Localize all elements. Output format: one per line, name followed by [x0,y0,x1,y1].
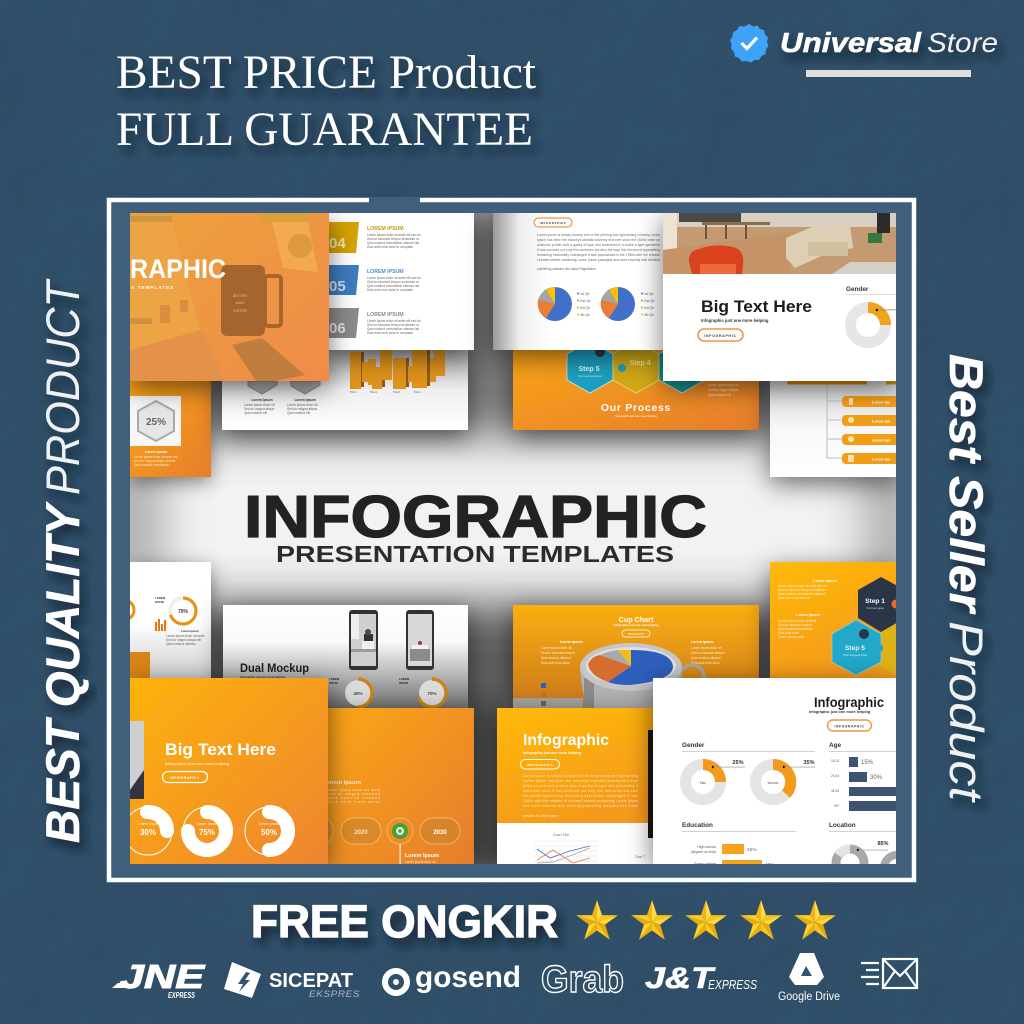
tab 06: LOREM IPSUM [367,312,404,318]
age bars: 65+ [834,804,840,808]
donut: man 25% [686,760,745,800]
slide: org chart: Lorem Ips [872,420,890,424]
central title [248,494,706,562]
donut 30%: 30% [140,828,156,837]
slide: dual mockup: IPSUM [399,681,409,685]
logo: SiCepat [224,962,360,999]
slide: infographic white dashboard: Education [682,822,713,829]
slide: 3D bar chart: Title 1 [350,390,358,394]
slide: step 1 puzzle: Lorem Ipsum [813,579,837,583]
tab 04: LOREM IPSUM [367,226,404,232]
slide: our process: Sed do magna aliqua [708,388,738,392]
tab 04 [329,222,421,253]
product frame [109,197,914,880]
slide: 70% ring, left: Lorem ipsum dolor sit amet [166,634,205,638]
slide: infographic yellow with chart: Chart T [635,855,645,859]
slide: timeline orange: quis nostrud ullamco [328,796,380,800]
education bars: High school [697,845,716,849]
slide: timeline orange: 2030 [433,830,447,836]
donut: woman 35% [756,760,815,800]
badge: INFOGRAPHIC [170,776,200,780]
slide: org chart [770,381,912,477]
slide: dual mockup: Infographic just one more helping [240,675,285,679]
slide: dual mockup: Dual Mockup [240,663,309,675]
line chart: Chart Title [553,833,569,837]
age bars: 18-24 [831,759,839,763]
cup white [260,213,308,222]
badge [698,329,743,341]
logo: JNE [112,958,205,1000]
timeline pills [300,818,460,844]
slide: cup chart: Quis nostrud ullamco [691,656,721,660]
slide: pie charts: Letraset sheets containing Lorem Ipsum passages and more recently with desktop [537,258,660,262]
slide: list 04 05 06 [329,213,474,350]
slide: org chart: Lorem Ips [872,438,890,442]
pie 2 legend: 4th Qtr [644,313,655,317]
puzzle hexagons: Your text goes here [578,374,603,378]
pie 2 [601,287,635,321]
slide: big text here, orange with donuts: Infographic just one more helping [165,761,230,766]
store name [780,27,998,58]
slide: step 1 puzzle: Sed do eiusmod tempor [778,623,813,627]
slide: timeline orange: sed do magna eiusmod [328,792,380,796]
side label: best seller product: Product [940,621,993,803]
education bars [691,844,775,870]
pie 1 legend [577,292,592,317]
badge: INFOGRAPHIC [704,334,737,338]
donut 50% [245,807,293,855]
tab 05: Duis aute irure dolor in voluptate [367,288,413,292]
logo: JNE: EXPRESS [168,991,195,1000]
slide: step 1 puzzle: Quis nostrud exercitation [778,627,813,631]
slide: 70% ring, left: IPSUM [155,600,165,604]
puzzle hexagons [566,350,704,394]
slide: infographic yellow with chart: when an unknown printer took a galley of type and scrambled it [523,784,638,788]
yellow hexagon [874,622,920,676]
slide: step 1 puzzle: Lorem ipsum dolor [778,635,805,639]
tab 05: Quis nostrud exercitation ullamco lab [367,284,419,288]
slide: infographic white dashboard: Infographic just one more helping [809,710,871,714]
dark hexagon: step 1: Your text goes [866,606,884,610]
pie 2 legend: 1st Qtr [644,292,655,296]
interior photo [663,213,896,274]
donut: man 25%: Man [700,781,706,785]
slide: step 1 puzzle: Duis aute irure [778,631,799,635]
slide: infographic white dashboard: Age [829,742,842,749]
mug: BETTER [233,294,247,298]
slide: step 1 puzzle [770,562,920,678]
slide: cup chart: Lorem Ipsum [691,640,714,644]
donut 50%: 50% [261,828,277,837]
badge [622,630,650,637]
slide: infographic yellow with chart: Lorem Ipsum has been the industrys standard dummy text ever [523,779,639,783]
side label: best quality product: PRODUCT [36,278,89,495]
slide: 3D bar chart: Quis nostrud elit [244,411,267,415]
tab 06: Sed do eiusmod tempor incididunt ut [367,323,419,327]
slide: cup chart: Sed do eiusmod tempor [691,651,726,655]
donut 50%: Lorem Ipsum [259,822,279,826]
tab 04: Quis nostrud exercitation ullamco lab [367,241,419,245]
age bars: 30% [870,775,883,781]
slide: big text here, orange with donuts: Big Text Here [165,740,276,759]
store name: Universal [780,27,922,58]
slide: infographic yellow with chart: versions of Lorem Ipsum [523,814,558,818]
education bars: (degree or less) [691,850,716,854]
logo: J&T Express: J&T [645,962,716,995]
slide: cup chart: Duis aute irure dolor [541,661,571,665]
education bars: Some college [694,862,716,866]
mug: MUG [236,301,244,305]
slide: 3D bar chart: Title 4 [414,390,422,394]
location donut: 85% [878,841,889,847]
slide: our process [513,341,759,430]
pills [842,396,912,464]
five rating stars [576,900,836,940]
central title: PRESENTATION TEMPLATES [276,541,674,567]
logo: SiCepat: EKSPRES [309,989,360,999]
slide: infographic yellow with chart: Infographic [523,732,609,749]
ring 70% [418,679,446,707]
slide: infographic yellow with chart: Lorem ipsum is simply dummy text of the printing and typesetting [523,774,638,778]
slide: pie charts: publishing software like Aldus PageMaker [537,267,597,271]
slide: big text here, white: Infographic just one more helping [701,318,769,323]
slide: pie charts: remaining essentially unchanged It was popularised in the 1960s with the release [537,253,660,257]
tab 05 [329,265,421,295]
slide: big text here, white [663,213,896,381]
age bars [831,757,896,811]
slide: timeline orange: orem ipsum dolor sit amet [328,788,380,792]
underline bar [806,70,971,77]
slide: step 1 puzzle: Lorem Ipsum [796,613,820,617]
badge: INFOGRAPHIC [628,633,645,636]
dark hexagon: step 1: Step 1 [865,598,885,605]
slide: timeline orange: orem Ipsum [328,780,361,786]
ring 70%: 70% [427,691,437,696]
ring 70%: 70% [178,609,189,615]
slide: infographic yellow with chart: electronic typesetting remaining essentially unchanged It was [523,794,638,798]
cup graphic [580,643,704,714]
slide: cup chart: Lorem ipsum dolor sit [691,646,722,650]
slide: timeline orange: Lorem Ipsum [405,853,439,859]
slide: timeline orange: 2020 [354,830,368,836]
pie 2 legend: 2nd Qtr [644,299,656,303]
slide: 70% ring, left [114,562,211,684]
tab 06 [329,308,421,338]
slide: dual mockup: LOREM [399,677,410,681]
slide: 3D bar chart: Lorem Ipsum [251,398,273,402]
slide: infographic yellow with chart: specimen book It has survived not only five centuries but also [523,789,638,793]
puzzle hexagons: Step 4 [629,360,651,367]
slide: pie charts: Ipsum has been the industrys standard dummy text ever since the 1500s when an [537,238,660,242]
ring 45%: 45% [353,691,363,696]
slide: 70% ring, left: Lorem Ipsum [181,629,199,633]
slide: 3D bar chart: Lorem Ipsum [294,398,316,402]
slide: infographic white dashboard [653,678,910,881]
sofa [786,225,853,268]
slide: step 1 puzzle: Lorem ipsum dolor sit amet [778,619,817,623]
slide: 25% hexagon: Lorem Ipsum [145,450,167,454]
slide: infographic yellow with chart: Infographic just one more helping [523,751,581,755]
store name: Store [927,27,998,58]
slide: infographic yellow with chart: and more recently with desktop publishing software like Aldus [523,804,638,808]
slide: orange photo cover [130,213,329,381]
tab 04: 04 [329,235,346,252]
headline: best price, full guarantee: BEST PRICE Product [116,46,537,99]
dark hexagon: step 1 [858,577,905,639]
store badge: Universal Store [730,24,998,77]
slide: 70% ring, left: Quis nostrud ullamco [166,642,196,646]
pie 1 legend: 3rd Qtr [580,306,591,310]
slide: orange photo cover: N TEMPLATES [131,285,174,290]
tab 05: LOREM IPSUM [367,269,404,275]
donut 75%: 75% [199,828,215,837]
slide: pie charts [493,213,663,350]
badge: INFOGRAPHIC [834,724,865,728]
pie 1 legend: 1st Qtr [580,292,591,296]
slide: cup chart: Duis aute irure dolor [691,661,721,665]
slide: step 1 puzzle: Duis aute irure dolor in [778,596,810,600]
slide: 25% hexagon [130,381,211,477]
legend [541,683,546,706]
pie 1 [538,287,572,321]
tab 05: Sed do eiusmod tempor incididunt ut [367,280,419,284]
collage of slides [130,213,896,864]
slide: big text here, white: Big Text Here [701,297,812,316]
slide: our process: Quis nostrud elit [708,393,731,397]
shipping partner logos [112,953,917,1003]
red chair [689,245,743,274]
pie 1 legend: 4th Qtr [580,313,591,317]
slide: cup chart: Lorem Ipsum [560,640,583,644]
pie 2 legend: 3rd Qtr [644,306,655,310]
teal hexagon: step 5 [832,620,883,675]
phone 2 [406,610,434,670]
slide: step 1 puzzle: Quis nostrud exercitation ullamco [778,592,825,596]
mug: COFFEE [233,309,248,313]
slide: cup chart: Cup Chart [619,615,654,624]
tab 06: Duis aute irure dolor in voluptate [367,331,413,335]
slide: cup chart: Lorem ipsum dolor sit [541,646,572,650]
slide: timeline orange: duis aute irure dolor [328,800,381,804]
side label: best quality product [36,278,89,843]
badge [828,720,872,731]
headline: best price, full guarantee: FULL GUARANTEE [116,103,533,156]
slide: dual mockup: IPSUM [329,681,339,685]
logo: gosend: gosend [415,961,521,994]
puzzle hexagons: Step 5 [578,366,600,373]
side label: best quality product: BEST QUALITY [36,501,89,843]
slide: dual mockup: LOREM [329,677,340,681]
icon: verified check [730,24,768,62]
line chart [534,833,598,863]
donut: woman 35%: 35% [803,760,815,766]
slide: 25% hexagon: Sed do magna aliqua ut enim [134,459,176,463]
bars [350,350,445,389]
logo: J&T Express: EXPRESS [708,977,757,992]
slide: 3D bar chart: Title 2 [370,390,378,394]
slide: cup chart: Quis nostrud ullamco [541,656,571,660]
slide: infographic white dashboard: Infographic [814,694,884,710]
age bars: 45-64 [831,789,839,793]
slide: 3D bar chart: Lorem ipsum dolor sit [287,403,318,407]
logo: J&T Express [645,962,757,995]
age bars: 25-44 [831,774,839,778]
slide: org chart: Lorem Ips [872,400,890,404]
education bars: 45% [765,862,775,868]
tab 06: Quis nostrud exercitation ullamco lab [367,327,419,331]
pie 2 legend [641,292,656,317]
slide: step 1 puzzle: Lorem ipsum dolor sit amet elit sed [778,584,828,588]
logo: Google Drive: Google Drive [778,991,840,1003]
slide: step 1 puzzle: Sed do eiusmod tempor incididunt [778,588,826,592]
badge: INFOGRAPHIC [527,763,554,767]
tab 04: Sed do eiusmod tempor incididunt ut [367,237,419,241]
slide: our process: Lorem ipsum dolor sit [708,383,739,387]
slide: 3D bar chart: Title 3 [393,390,401,394]
slide: cup chart: Sed do eiusmod tempor [541,651,576,655]
slide: 70% ring, left: LOREM [155,596,166,600]
ring 45% [344,679,372,707]
photo strip [130,721,144,799]
teal hexagon: step 5: Your text goes here [843,653,868,657]
phone 1 [349,610,378,670]
teal hexagon: step 5: Step 5 [845,645,865,652]
slide: pie charts: It has survived not only five centuries but also the leap into electronic typesetting [537,248,660,252]
slide: timeline orange: Lorem ipsum dolor sit [405,860,436,864]
badge [534,218,572,227]
age bars: 15% [861,760,874,766]
badge [162,772,208,782]
logo: JNE: JNE [120,958,205,995]
slide: 3D bar chart: Quis nostrud elit [287,411,310,415]
slide: our process: Infographic just one more helping [615,414,657,418]
slide: 3D bar chart [222,350,468,430]
logo: Google Drive [778,953,840,1003]
hexagons [248,381,277,394]
slide: timeline orange [300,708,474,864]
tab 06: 06 [329,320,346,337]
location donut [836,841,910,881]
slide: infographic yellow with chart [497,708,654,864]
tab 06: Lorem ipsum dolor sit amet elit sed do [367,319,421,323]
slide: 3D bar chart: Sed do magna aliqua [244,407,274,411]
logo: Grab: Grab [541,959,624,1001]
donut: woman 35%: Woman [768,781,779,785]
donut 30% [124,807,172,855]
tab 04: Lorem ipsum dolor sit amet elit sed do [367,233,421,237]
mug [221,265,281,336]
slide: infographic white dashboard: Location [829,822,856,829]
slide: orange photo cover: RAPHIC [130,254,226,284]
tab 04: Duis aute irure dolor in voluptate [367,245,413,249]
badge [520,760,560,769]
slide: 3D bar chart: Lorem ipsum dolor sit [244,403,275,407]
slide: pie charts: unknown printer took a galley of type and scrambled it to make a type specimen [537,243,660,247]
donut: man 25%: 25% [732,760,744,766]
slide: 25% hexagon: Lorem ipsum dolor sit amet elit [134,455,178,459]
central title: INFOGRAPHIC [244,484,707,550]
slide: infographic white dashboard: Gender [682,742,705,749]
slide: org chart: Lorem Ips [872,458,890,462]
education bars: 25% [747,847,757,853]
slide: big text here, white: Gender [846,286,869,293]
side label: best seller product: Best Seller [940,354,993,615]
pie 1 legend: 2nd Qtr [580,299,592,303]
slide: dual mockup [223,605,468,710]
slide: 3D bar chart: Sed do magna aliqua [287,407,317,411]
tab 05: Lorem ipsum dolor sit amet elit sed do [367,276,421,280]
slide: cup chart: Infographic just one more helping [613,623,659,627]
tab 05: 05 [329,278,346,295]
phone [232,338,305,381]
slide: pie charts: Lorem ipsum is simply dummy text of the printing and typesetting industry Lorem [537,233,660,237]
slide: 70% ring, left: Sed do magna aliqua elit [166,638,201,642]
slide: our process: Our Process [601,402,671,414]
donut 30%: Lorem Ipsum [138,822,158,826]
donut 75%: Lorem Ipsum [197,822,217,826]
slide: 25% hexagon: Quis nostrud exercitation [134,463,169,467]
badge: INFOGRAPHIC [540,221,567,225]
side label: best seller product [940,354,993,803]
logo: SiCepat: SICEPAT [269,970,353,992]
icon: mail [861,959,917,988]
hexagon 25%: 25% [146,417,166,428]
slide: cup chart [513,605,759,714]
slide: infographic yellow with chart: 1960s with the release of Letraset sheets containing Lorem Ipsum [523,799,638,803]
gender donut [850,308,896,342]
laptop [130,252,200,350]
green milestone [387,818,413,864]
donut 75% [183,807,231,855]
free ongkir: FREE ONGKIR [251,896,558,947]
slide: big text here, orange with donuts [124,678,328,864]
mini bars [155,619,166,631]
headline: best price, full guarantee [116,46,537,156]
